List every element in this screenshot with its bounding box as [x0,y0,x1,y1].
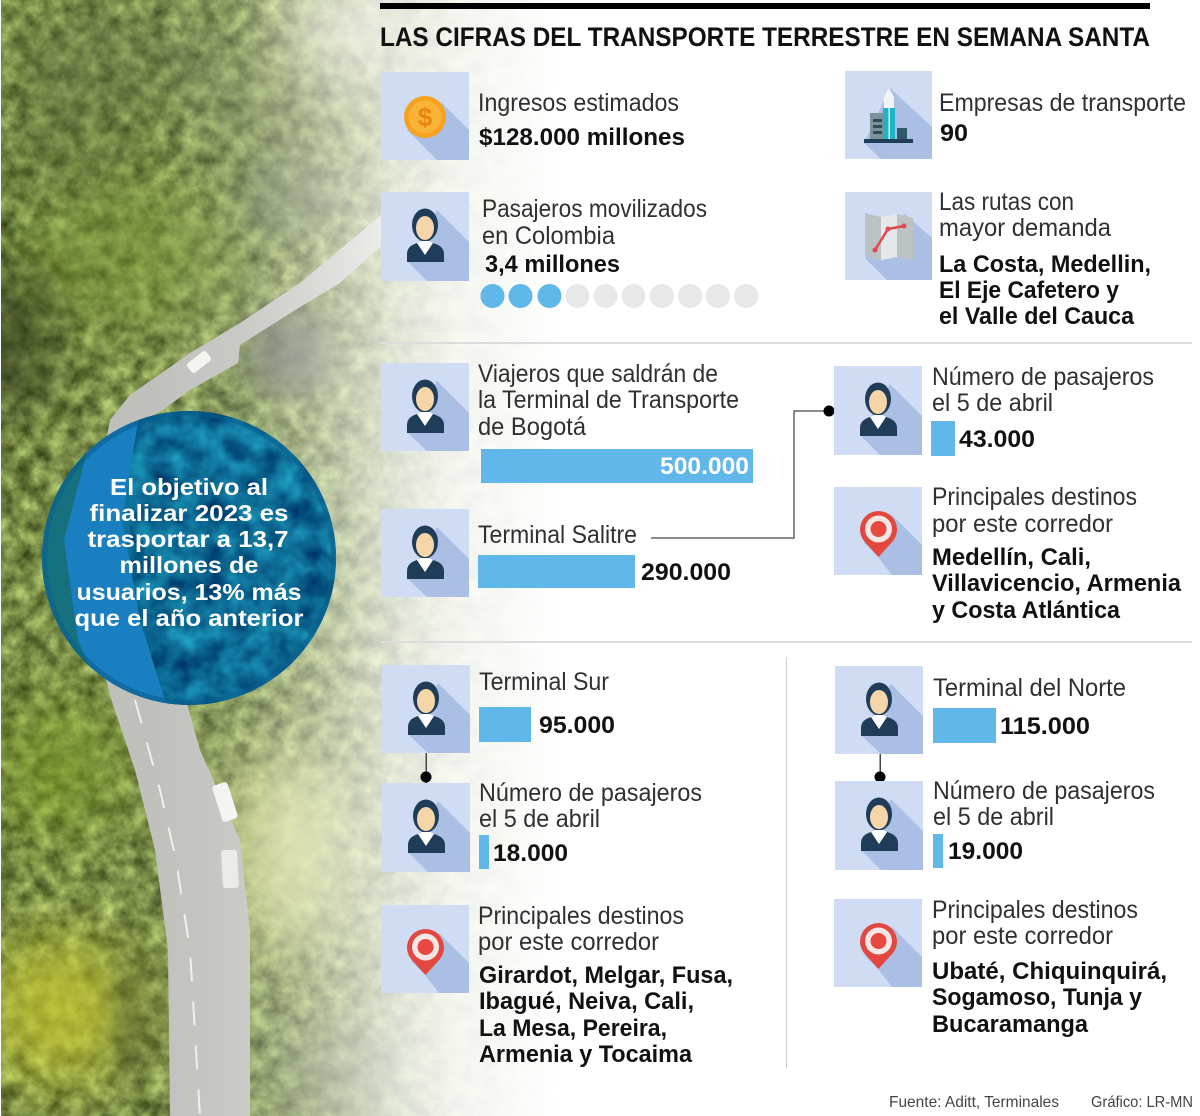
panel: ingresos estimados: Ingresos estimados [478,89,679,117]
panel: rutas con mayor demanda: El Eje Cafetero y [939,277,1120,304]
panel: empresas de transporte: Empresas de transporte [939,89,1186,117]
connector: Norte [874,754,886,782]
bar: 18.000 [479,835,489,869]
panel: Sur pasajeros 5 de abril: 18.000 [493,840,568,867]
vehicles on the road [186,350,239,888]
panel: empresas de transporte: 90 [940,120,968,147]
icon: map [845,192,932,280]
footer credits [889,1094,1193,1111]
callout: blue circle goal: trasportar a 13,7 [88,526,288,552]
callout: blue circle goal: usuarios, 13% más [76,579,302,605]
bar: 95.000 [479,707,531,742]
bar: 19.000 [933,834,943,868]
connector: Salitre to 5 de abril [651,406,834,538]
panel: Salitre pasajeros 5 de abril: el 5 de abril [932,389,1053,417]
panel: Norte pasajeros 5 de abril: Número de pasajeros [933,777,1155,805]
panel: destinos Sur: Girardot, Melgar, Fusa, [479,962,733,989]
panel: destinos Sur: La Mesa, Pereira, [479,1015,667,1042]
bar: 500.000 [481,449,753,483]
callout: blue circle goal: millones de [120,552,258,578]
icon: person [382,783,470,872]
panel: pasajeros movilizados: 3,4 millones [485,251,620,278]
icon: person [382,665,470,753]
bar: 500.000: 500.000 [660,453,749,480]
icon: person [381,192,469,281]
panel: rutas con mayor demanda: Las rutas con [939,188,1074,216]
panel: Sur pasajeros 5 de abril: el 5 de abril [479,805,600,833]
panel: destinos Norte: Ubaté, Chiquinquirá, [932,958,1167,985]
panel: terminal Salitre [381,509,731,597]
footer credits: Gráfico: LR-MN [1091,1094,1193,1111]
panel: ingresos estimados: $128.000 millones [479,124,685,151]
panel: destinos Sur: Armenia y Tocaima [479,1041,693,1068]
icon: person [835,666,923,754]
panel: viajeros terminal de Bogotá: de Bogotá [478,413,586,441]
panel: Sur pasajeros 5 de abril: Número de pasajeros [479,779,702,807]
icon: building [845,71,932,159]
panel: Norte pasajeros 5 de abril [835,777,1155,870]
panel: destinos Salitre: Medellín, Cali, [932,544,1091,571]
panel: terminal Sur [382,665,615,753]
panel: Sur pasajeros 5 de abril [382,779,702,872]
panel: viajeros terminal de Bogotá: Viajeros que saldrán de [478,360,718,388]
icon: coin: $ [418,102,433,132]
panel: terminal del Norte: 115.000 [1000,713,1090,740]
panel: empresas de transporte [845,71,1186,159]
footer credits: Fuente: Aditt, Terminales [889,1094,1059,1111]
panel: terminal Salitre: Terminal Salitre [478,521,637,549]
panel: destinos Salitre: Villavicencio, Armenia [932,570,1182,597]
panel: viajeros terminal de Bogotá [381,360,753,483]
icon: person [381,509,469,597]
panel: destinos Norte: por este corredor [932,922,1113,950]
panel: terminal Salitre: 290.000 [641,559,731,586]
road [106,216,381,1116]
callout: blue circle goal: finalizar 2023 es [90,500,288,526]
bar: 115.000 [933,708,996,743]
panel: Salitre pasajeros 5 de abril: Número de pasajeros [932,363,1154,391]
panel: destinos Sur: por este corredor [478,928,659,956]
panel: rutas con mayor demanda: el Valle del Cauca [939,303,1135,330]
panel: terminal Sur: Terminal Sur [479,668,609,696]
panel: terminal Sur: 95.000 [539,712,615,739]
panel: pasajeros movilizados: en Colombia [482,222,615,250]
dot scale: 3 of 10 [480,284,758,308]
panel: rutas con mayor demanda [845,188,1151,330]
panel: Salitre pasajeros 5 de abril [834,363,1154,456]
panel: Norte pasajeros 5 de abril: el 5 de abril [933,803,1054,831]
panel: destinos Norte: Bucaramanga [932,1011,1089,1038]
icon: person [834,366,922,455]
icon: map pin [834,899,922,987]
panel: terminal del Norte: Terminal del Norte [933,674,1126,702]
icon: person [835,781,923,870]
panel: destinos Sur: Principales destinos [478,902,684,930]
bar: 290.000 [478,555,635,588]
icon: map pin [381,905,469,993]
panel: viajeros terminal de Bogotá: la Terminal de Transporte [478,386,739,414]
connector: Sur [420,753,432,783]
panel: pasajeros movilizados [381,192,758,308]
panel: Salitre pasajeros 5 de abril: 43.000 [959,426,1035,453]
title [380,3,1150,52]
panel: destinos Salitre: por este corredor [932,510,1113,538]
icon: coin [381,72,469,160]
background: aerial photo of forest road [1,0,520,1116]
icon: person [381,363,469,451]
panel: destinos Salitre: Principales destinos [932,483,1137,511]
callout: blue circle goal: El objetivo al [110,474,268,500]
panel: rutas con mayor demanda: mayor demanda [939,214,1111,242]
panel: destinos Norte: Sogamoso, Tunja y [932,984,1143,1011]
icon: map pin [834,487,922,575]
panel: destinos Norte [834,896,1167,1038]
panel: Norte pasajeros 5 de abril: 19.000 [948,838,1023,865]
panel: destinos Sur [381,902,733,1068]
panel: terminal del Norte [835,666,1126,754]
panel: ingresos estimados [381,72,685,160]
bar: 43.000 [931,421,955,456]
callout: blue circle goal: que el año anterior [74,605,304,631]
panel: destinos Salitre: y Costa Atlántica [932,597,1121,624]
panel: destinos Norte: Principales destinos [932,896,1138,924]
panel: rutas con mayor demanda: La Costa, Medellin, [939,251,1151,278]
panel: destinos Sur: Ibagué, Neiva, Cali, [479,988,694,1015]
callout: blue circle goal [40,410,340,710]
panel: destinos Salitre [834,483,1182,624]
panel: pasajeros movilizados: Pasajeros movilizados [482,195,707,223]
